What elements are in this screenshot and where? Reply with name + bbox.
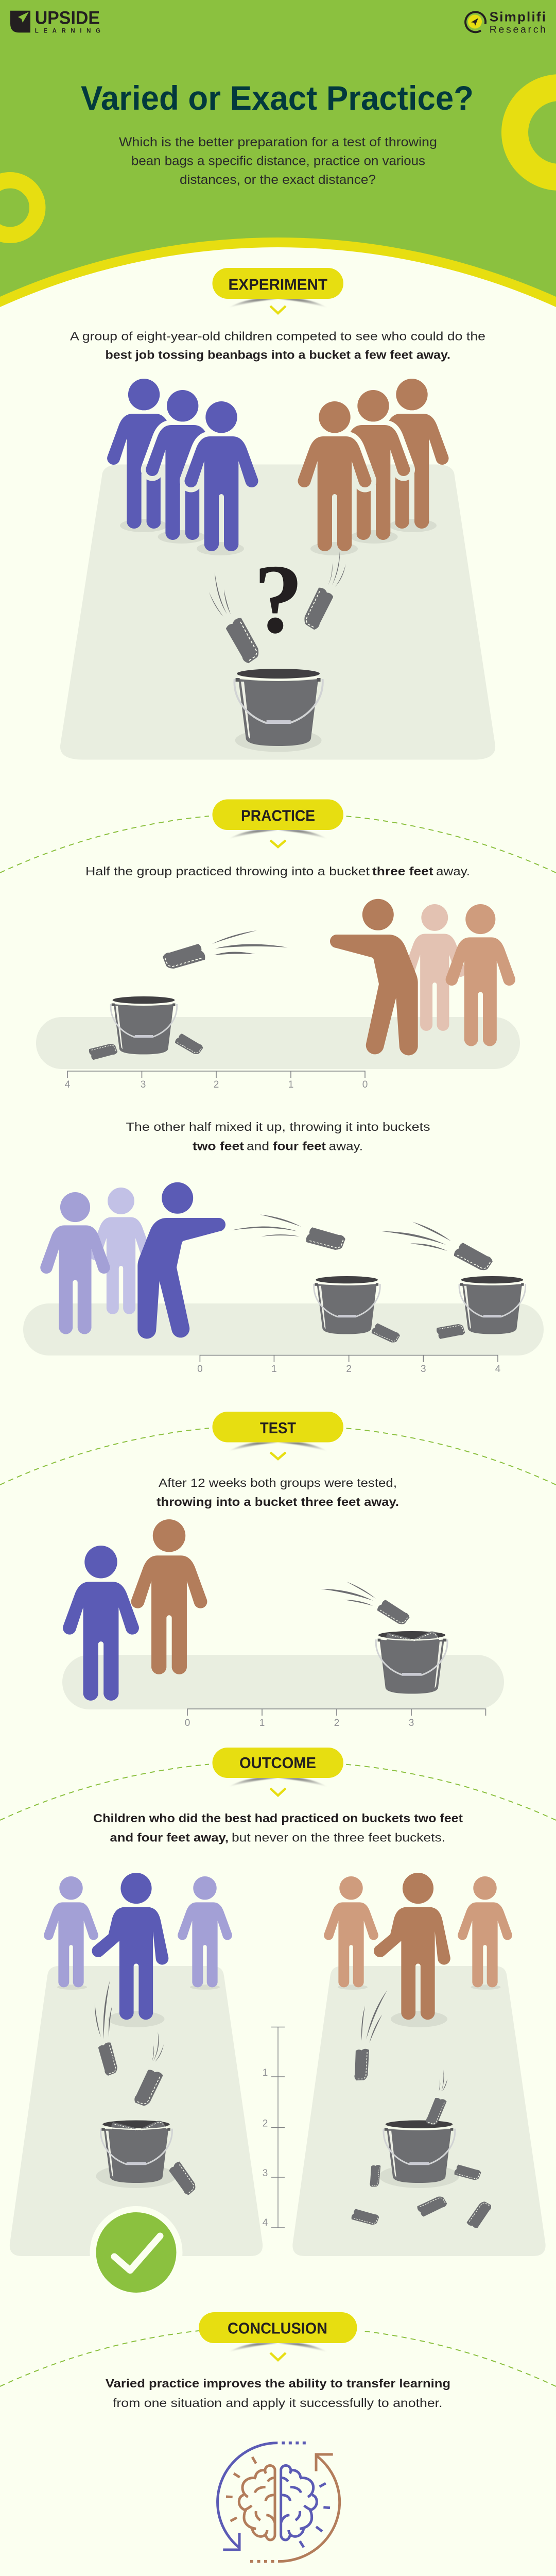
brown children, one throwing — [330, 899, 515, 1055]
floor panel: experiment — [60, 465, 495, 759]
distance ruler 4 to 0: 3 — [141, 1079, 146, 1090]
outcome text: but never on the three feet buckets. — [232, 1831, 445, 1844]
practice text one: Half the group practiced throwing into a bucket — [85, 865, 370, 878]
test text: After 12 weeks both groups were tested, — [159, 1476, 397, 1489]
distance ruler 0 to 4: 0 — [197, 1364, 203, 1375]
logo: Simplifi Research — [465, 9, 546, 35]
beanbag in flight with motion streaks — [321, 1582, 411, 1627]
badge: outcome: OUTCOME — [239, 1754, 316, 1772]
distance ruler 4 to 0: 1 — [288, 1079, 293, 1090]
yellow curved band — [0, 238, 556, 330]
distance ruler 0 to 4: 2 — [346, 1364, 352, 1375]
floor panel: varied group — [10, 1966, 263, 2256]
logo: Upside Learning: UPSIDE — [35, 8, 100, 28]
bucket with bags: exact group — [351, 1990, 493, 2230]
dashed arc: conclusion — [0, 2331, 556, 2386]
badge: experiment: EXPERIMENT — [229, 275, 327, 294]
distance ruler 4 to 0: 2 — [214, 1079, 219, 1090]
badge: test: TEST — [260, 1419, 296, 1437]
distance ruler 0 to 3: 3 — [409, 1718, 414, 1728]
practice text two: away. — [328, 1140, 363, 1153]
badge: practice: PRACTICE — [241, 806, 315, 824]
practice text two — [126, 1120, 430, 1153]
practice text one — [85, 865, 470, 878]
two buckets with beanbags — [314, 1276, 526, 1345]
distance ruler 4 to 0: 4 — [65, 1079, 71, 1090]
intro text — [119, 135, 437, 187]
floor shadows: outcome — [57, 1985, 500, 2188]
shadows under experiment figures — [120, 519, 437, 752]
purple child — [63, 1546, 139, 1701]
practice text two: and — [247, 1140, 269, 1153]
badge: conclusion: CONCLUSION — [228, 2319, 327, 2337]
decorative yellow ring right — [515, 88, 556, 177]
distance ruler 0 to 4: 3 — [421, 1364, 426, 1375]
distance ruler 0 to 4: 4 — [495, 1364, 501, 1375]
logo: Upside Learning: LEARNING — [35, 28, 100, 34]
badge: experiment — [212, 268, 343, 313]
outcome text — [93, 1811, 463, 1844]
purple children: winning group — [44, 1873, 232, 2020]
beanbags falling, with motion streaks — [209, 551, 346, 665]
brown children: exact group — [324, 1873, 512, 2020]
experiment text: A group of eight-year-old children competed to see who could do the — [70, 330, 485, 343]
experiment text — [70, 330, 485, 362]
conclusion text: from one situation and apply it successfully to another. — [113, 2396, 443, 2410]
vertical distance ruler: 4 — [263, 2217, 268, 2228]
conclusion text — [106, 2377, 450, 2410]
brown child — [131, 1519, 207, 1674]
brown group of three children — [298, 379, 448, 551]
distance ruler 0 to 3: 0 — [185, 1718, 190, 1728]
distance ruler 4 to 0: 0 — [362, 1079, 368, 1090]
practice text two: four feet — [273, 1140, 326, 1153]
bucket with bags: varied group — [95, 1980, 198, 2196]
logo: Simplifi Research: Simplifi — [490, 9, 546, 25]
experiment text: best job tossing beanbags into a bucket a few feet away. — [105, 348, 450, 362]
intro text: bean bags a specific distance, practice on various — [131, 154, 425, 168]
vertical distance ruler: 2 — [263, 2119, 268, 2129]
beanbags in flight with motion streaks — [231, 1215, 494, 1273]
badge: outcome — [212, 1748, 343, 1795]
outcome text: and four feet away, — [110, 1831, 229, 1844]
badge: test — [212, 1412, 343, 1459]
test text — [157, 1476, 399, 1509]
dashed arc: practice — [0, 816, 556, 873]
conclusion text: Varied practice improves the ability to transfer learning — [106, 2377, 450, 2390]
badge: practice — [212, 800, 343, 847]
vertical distance ruler: 3 — [263, 2168, 268, 2179]
purple children, one throwing — [40, 1182, 225, 1338]
distance ruler 0 to 4 — [197, 1355, 501, 1375]
badge: conclusion — [199, 2312, 357, 2360]
distance ruler 0 to 3: 1 — [259, 1718, 265, 1728]
intro text: distances, or the exact distance? — [180, 173, 376, 187]
floor panel: exact group — [292, 1966, 546, 2256]
practice text one: three feet — [372, 865, 433, 878]
outcome text: Children who did the best had practiced on buckets two feet — [93, 1811, 463, 1825]
practice text one: away. — [436, 865, 470, 878]
purple group of three children — [107, 379, 258, 551]
vertical distance ruler: 1 — [263, 2067, 268, 2078]
logo: Upside Learning — [10, 8, 100, 34]
check mark badge — [90, 2206, 182, 2299]
ground panel: varied practice — [23, 1303, 544, 1355]
icon: brain with circular arrows — [218, 2443, 340, 2562]
green header background — [0, 0, 556, 330]
bucket with missed bags — [89, 996, 204, 1060]
vertical distance ruler — [263, 2027, 285, 2228]
decorative yellow ring left — [0, 180, 38, 235]
dashed arc: test — [0, 1428, 556, 1485]
practice text two: two feet — [193, 1140, 244, 1153]
logo: Simplifi Research: Research — [490, 24, 546, 35]
title: Varied or Exact Practice? — [81, 79, 474, 117]
distance ruler 0 to 3: 2 — [334, 1718, 339, 1728]
beanbag in flight with motion streaks — [162, 930, 288, 971]
bucket — [234, 669, 323, 746]
distance ruler 4 to 0 — [65, 1071, 368, 1090]
intro text: Which is the better preparation for a test of throwing — [119, 135, 437, 149]
test text: throwing into a bucket three feet away. — [157, 1495, 399, 1509]
question mark: ? — [254, 544, 303, 654]
ground panel: test — [62, 1655, 504, 1709]
dashed arc: outcome — [0, 1764, 556, 1820]
distance ruler 0 to 3 — [185, 1709, 486, 1728]
practice text two: The other half mixed it up, throwing it into buckets — [126, 1120, 430, 1133]
ground panel: exact practice — [36, 1017, 520, 1069]
bucket holding beanbags — [376, 1629, 447, 1694]
distance ruler 0 to 4: 1 — [271, 1364, 277, 1375]
